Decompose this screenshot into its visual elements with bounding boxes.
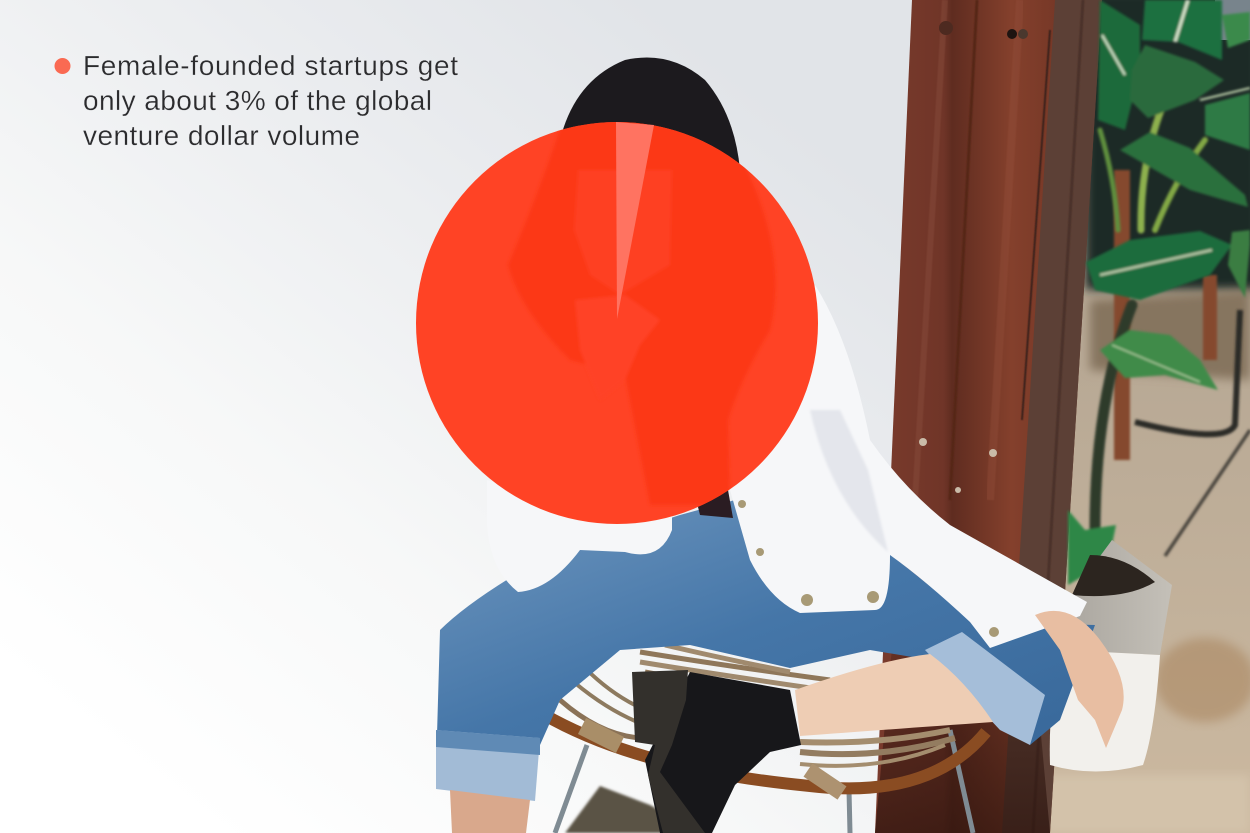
jacket buttons — [738, 500, 999, 637]
plant stems — [1095, 100, 1205, 530]
woman — [436, 58, 1124, 833]
pie chart: 3 percent share — [416, 120, 818, 524]
caption text: Female-founded startups get — [83, 50, 458, 81]
hand — [1035, 611, 1124, 748]
pie disc — [416, 122, 818, 524]
jacket shading — [810, 410, 888, 552]
plant leaves — [1068, 0, 1250, 585]
belt — [695, 490, 733, 518]
wooden post — [875, 0, 1102, 833]
bare ankle — [795, 654, 993, 736]
3 percent wedge — [616, 122, 654, 319]
bare leg — [450, 790, 530, 833]
boot heel — [632, 670, 705, 833]
white jacket right — [730, 285, 1087, 648]
white jacket left — [487, 480, 672, 592]
bullet dot — [54, 58, 70, 74]
post screws — [919, 21, 1028, 493]
hair — [560, 58, 740, 190]
background stool legs — [1114, 170, 1250, 556]
plant — [1068, 0, 1250, 585]
background floor and garden — [1040, 0, 1250, 833]
caption text — [83, 50, 458, 151]
chair back legs — [555, 730, 973, 833]
caption text: venture dollar volume — [83, 120, 360, 151]
left jeans cuff — [436, 730, 540, 801]
floor shadow — [565, 786, 700, 833]
boot — [645, 672, 801, 833]
jeans — [437, 500, 1095, 745]
white wall — [0, 0, 925, 833]
brown post edge — [1002, 0, 1102, 833]
woman seen through disc — [508, 120, 775, 505]
lower post shade — [875, 560, 1050, 833]
plant pot — [1050, 540, 1172, 772]
caption text: only about 3% of the global — [83, 85, 432, 116]
rattan chair — [543, 645, 986, 793]
right jeans cuff — [925, 632, 1045, 745]
